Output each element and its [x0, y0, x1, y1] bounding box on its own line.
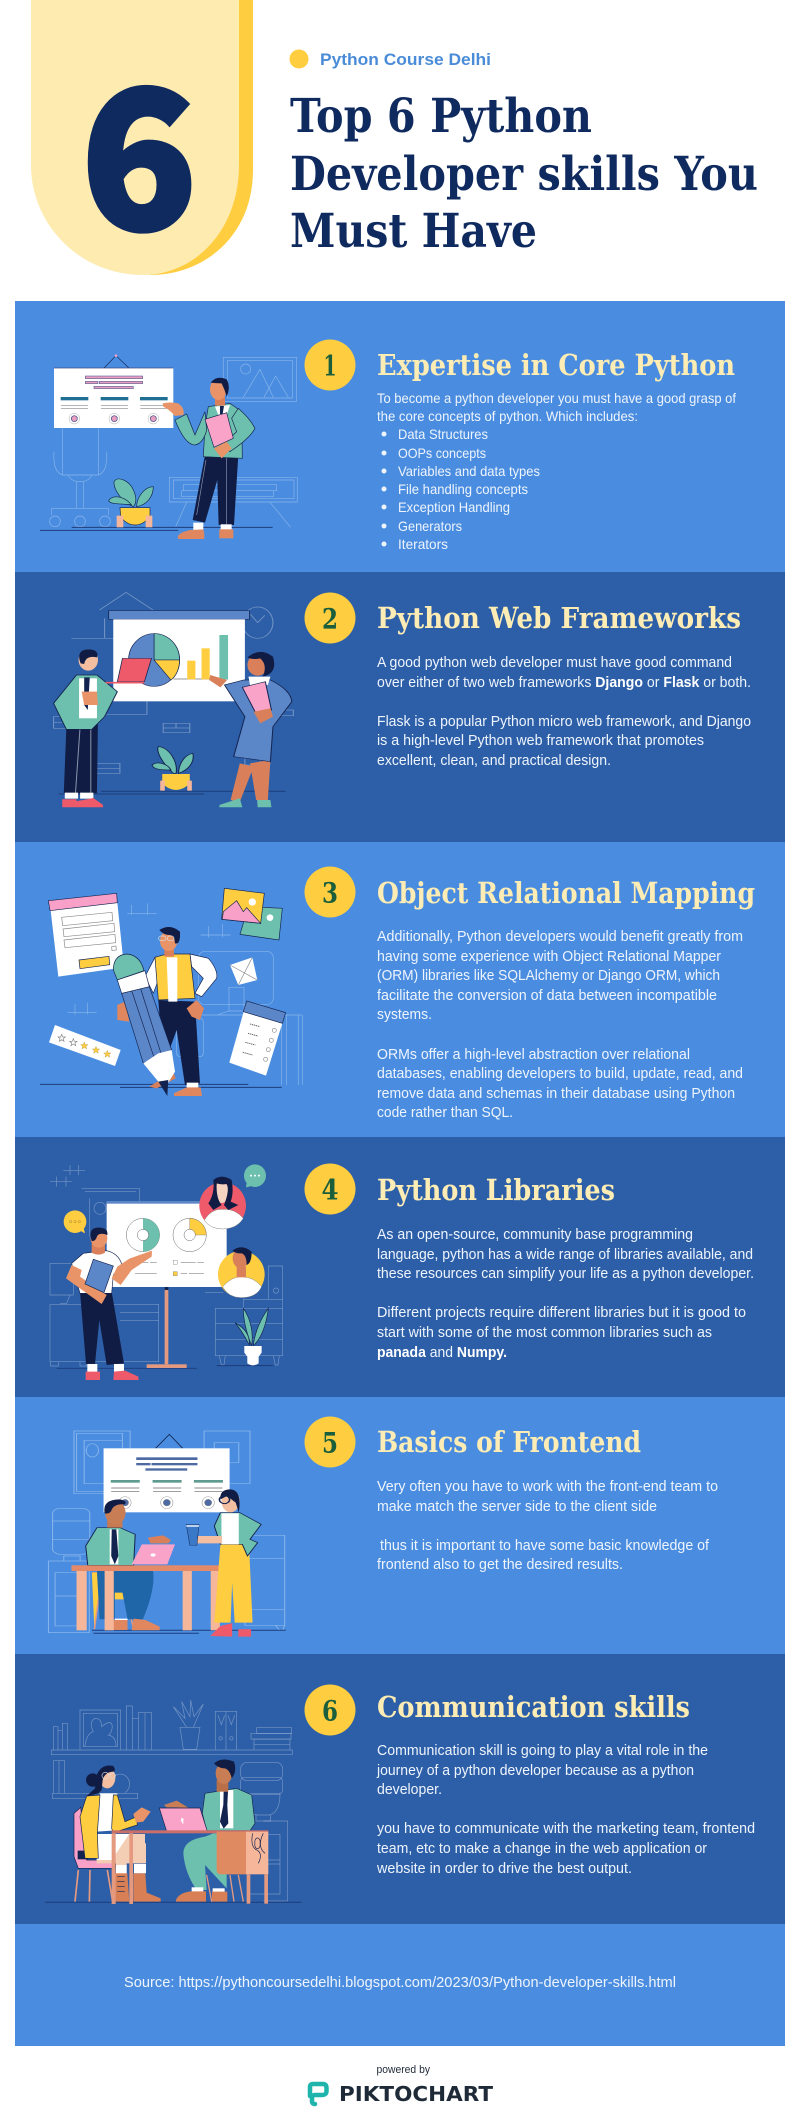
title: Developer skills You: [290, 146, 758, 201]
body text 5: thus it is important to have some basic knowledge of: [380, 1538, 710, 1554]
body text 5: [377, 1479, 718, 1573]
man with laptop: [54, 649, 152, 807]
title: Top 6 Python: [290, 88, 592, 143]
donut charts: [126, 1218, 206, 1252]
number badge 3: [304, 866, 356, 918]
body text 6: you have to communicate with the marketing team, frontend: [377, 1821, 755, 1837]
body text 3: remove data and schemas in their database using Python: [377, 1086, 735, 1102]
panel: section 6: [15, 1654, 785, 1924]
body text 2: over either of two web frameworks Django or Flask or both.: [377, 675, 751, 691]
brand label: Python Course Delhi: [320, 50, 491, 69]
number badge 1: [304, 340, 356, 390]
heading 2: Python Web Frameworks: [377, 601, 741, 635]
heading 1: Expertise in Core Python: [377, 348, 735, 382]
body text 6: website in order to drive the best output.: [376, 1861, 632, 1877]
number badge 5: 5: [322, 1426, 338, 1460]
body text 2: is a high-level Python web framework that promotes: [377, 733, 704, 749]
footer: powered by piktochart: [310, 2064, 493, 2106]
number badge 6: 6: [322, 1694, 338, 1728]
seated man: [164, 1760, 255, 1902]
number badge 4: [304, 1164, 356, 1214]
illustration: online presentation: [50, 1164, 283, 1380]
illustration: designer with giant pencil: [40, 888, 303, 1096]
body text 6: team, etc to make a change in the web application or: [377, 1841, 707, 1857]
form card: [48, 893, 124, 977]
body text 6: Communication skill is going to play a vital role in the: [377, 1743, 708, 1759]
body text 3: (ORM) libraries like SQLAlchemy or Django ORM, which: [377, 968, 720, 984]
illustration: two presenters with chart: [54, 592, 293, 807]
woman with folder: [209, 652, 292, 807]
body text 6: [376, 1743, 755, 1877]
plant: [235, 1308, 268, 1365]
number badge 3: 3: [322, 876, 338, 910]
body text 6: journey of a python developer because as a python: [376, 1763, 694, 1779]
body text 1: Generators: [398, 519, 462, 534]
illustration: team at a desk: [48, 1431, 286, 1637]
panel: section 2: [15, 572, 785, 842]
avatar: man: [218, 1247, 265, 1298]
avatar: woman: [199, 1177, 246, 1229]
panel: section 1: [15, 301, 785, 572]
number badge 4: 4: [322, 1174, 338, 1206]
number badge 1: 1: [324, 350, 336, 382]
body text 1: Data Structures: [398, 427, 488, 442]
body text 3: facilitate the conversion of data between incompatible: [377, 988, 717, 1004]
body text 1: OOPs concepts: [398, 446, 486, 461]
illustration: two people talking: [45, 1700, 302, 1904]
body text 2: excellent, clean, and practical design.: [377, 753, 611, 769]
body text 5: frontend also to get the desired results.: [377, 1557, 623, 1573]
body text 1: Exception Handling: [398, 500, 510, 515]
body text 3: ORMs offer a high-level abstraction over relational: [377, 1047, 690, 1063]
header: [31, 0, 758, 285]
body text 2: [377, 655, 751, 769]
wall board: [104, 1434, 230, 1512]
body text 1: To become a python developer you must have a good grasp of: [377, 391, 736, 406]
body text 1: the core concepts of python. Which includes:: [377, 409, 638, 424]
envelope: [230, 957, 257, 985]
body text 6: developer.: [377, 1782, 442, 1798]
number badge 2: [304, 592, 356, 644]
number badge 5: [304, 1416, 356, 1468]
plant: [152, 747, 193, 791]
body text 4: Different projects require different libraries but it is good to: [377, 1305, 746, 1321]
body text 4: start with some of the most common libraries such as: [377, 1325, 712, 1341]
icon: piktochart logo: [310, 2084, 326, 2104]
title: [290, 88, 758, 258]
desk with laptop: [71, 1544, 224, 1630]
body text 4: these resources can simplify your life as a python developer.: [377, 1266, 754, 1282]
table: [112, 1830, 268, 1904]
person: [163, 378, 255, 539]
illustration: presenter with board: [40, 354, 297, 539]
rating strip: [49, 1025, 121, 1066]
panel: section 3: [15, 842, 785, 1137]
speech bubbles: [64, 1164, 266, 1233]
body text 5: make match the server side to the client side: [377, 1499, 657, 1515]
body text 3: Additionally, Python developers would benefit greatly from: [377, 929, 743, 945]
body text 1: Iterators: [398, 537, 448, 552]
presenter: [66, 1228, 152, 1380]
number badge 6: [304, 1684, 356, 1736]
person: [117, 927, 217, 1096]
laptop: [159, 1808, 207, 1831]
title: Must Have: [290, 203, 537, 258]
big number badge: 6: [81, 7, 197, 285]
body text 4: panada and Numpy.: [377, 1345, 507, 1361]
panel: section 4: [15, 1137, 785, 1397]
panel: section 5: [15, 1397, 785, 1654]
heading 6: Communication skills: [377, 1690, 690, 1724]
heading 5: Basics of Frontend: [377, 1425, 641, 1459]
body text 5: Very often you have to work with the front-end team to: [377, 1479, 718, 1495]
body text 3: code rather than SQL.: [377, 1105, 513, 1121]
body text 3: [377, 929, 743, 1121]
plant: [109, 479, 153, 527]
source text: Source: https://pythoncoursedelhi.blogspot.com/2023/03/Python-developer-skills.html: [124, 1975, 676, 1991]
panel: source: [15, 1924, 785, 2046]
seated woman: [74, 1765, 161, 1902]
footer: powered by piktochart: PIKTOCHART: [339, 2082, 493, 2106]
pie and bar chart: [129, 634, 228, 686]
heading 4: Python Libraries: [377, 1173, 615, 1207]
seated man: [86, 1499, 171, 1630]
body text 3: databases, enabling developers to build, update, read, and: [377, 1066, 743, 1082]
body text 3: having some experience with Object Relational Mapper: [377, 949, 721, 965]
checklist card: [229, 1001, 286, 1076]
presentation board: [107, 1201, 227, 1368]
body text 2: A good python web developer must have good command: [377, 655, 732, 671]
legend: [127, 1260, 204, 1276]
body text 3: systems.: [377, 1007, 432, 1023]
picture cards: [222, 888, 282, 940]
body text 4: As an open-source, community base programming: [377, 1227, 693, 1243]
body text 4: [377, 1227, 754, 1361]
body text 1: Variables and data types: [398, 464, 540, 479]
body text 2: Flask is a popular Python micro web framework, and Django: [377, 714, 751, 730]
big number badge: [31, 0, 253, 285]
footer: powered by piktochart: powered by: [376, 2064, 430, 2076]
projection screen: [109, 611, 249, 701]
body text 1: File handling concepts: [398, 482, 528, 497]
giant pencil: [113, 954, 175, 1096]
body text 1: [377, 391, 736, 552]
number badge 2: 2: [322, 602, 338, 636]
standing woman: [186, 1489, 261, 1637]
body text 4: language, python has a wide range of libraries available, and: [377, 1247, 753, 1263]
wall board: [54, 354, 173, 428]
